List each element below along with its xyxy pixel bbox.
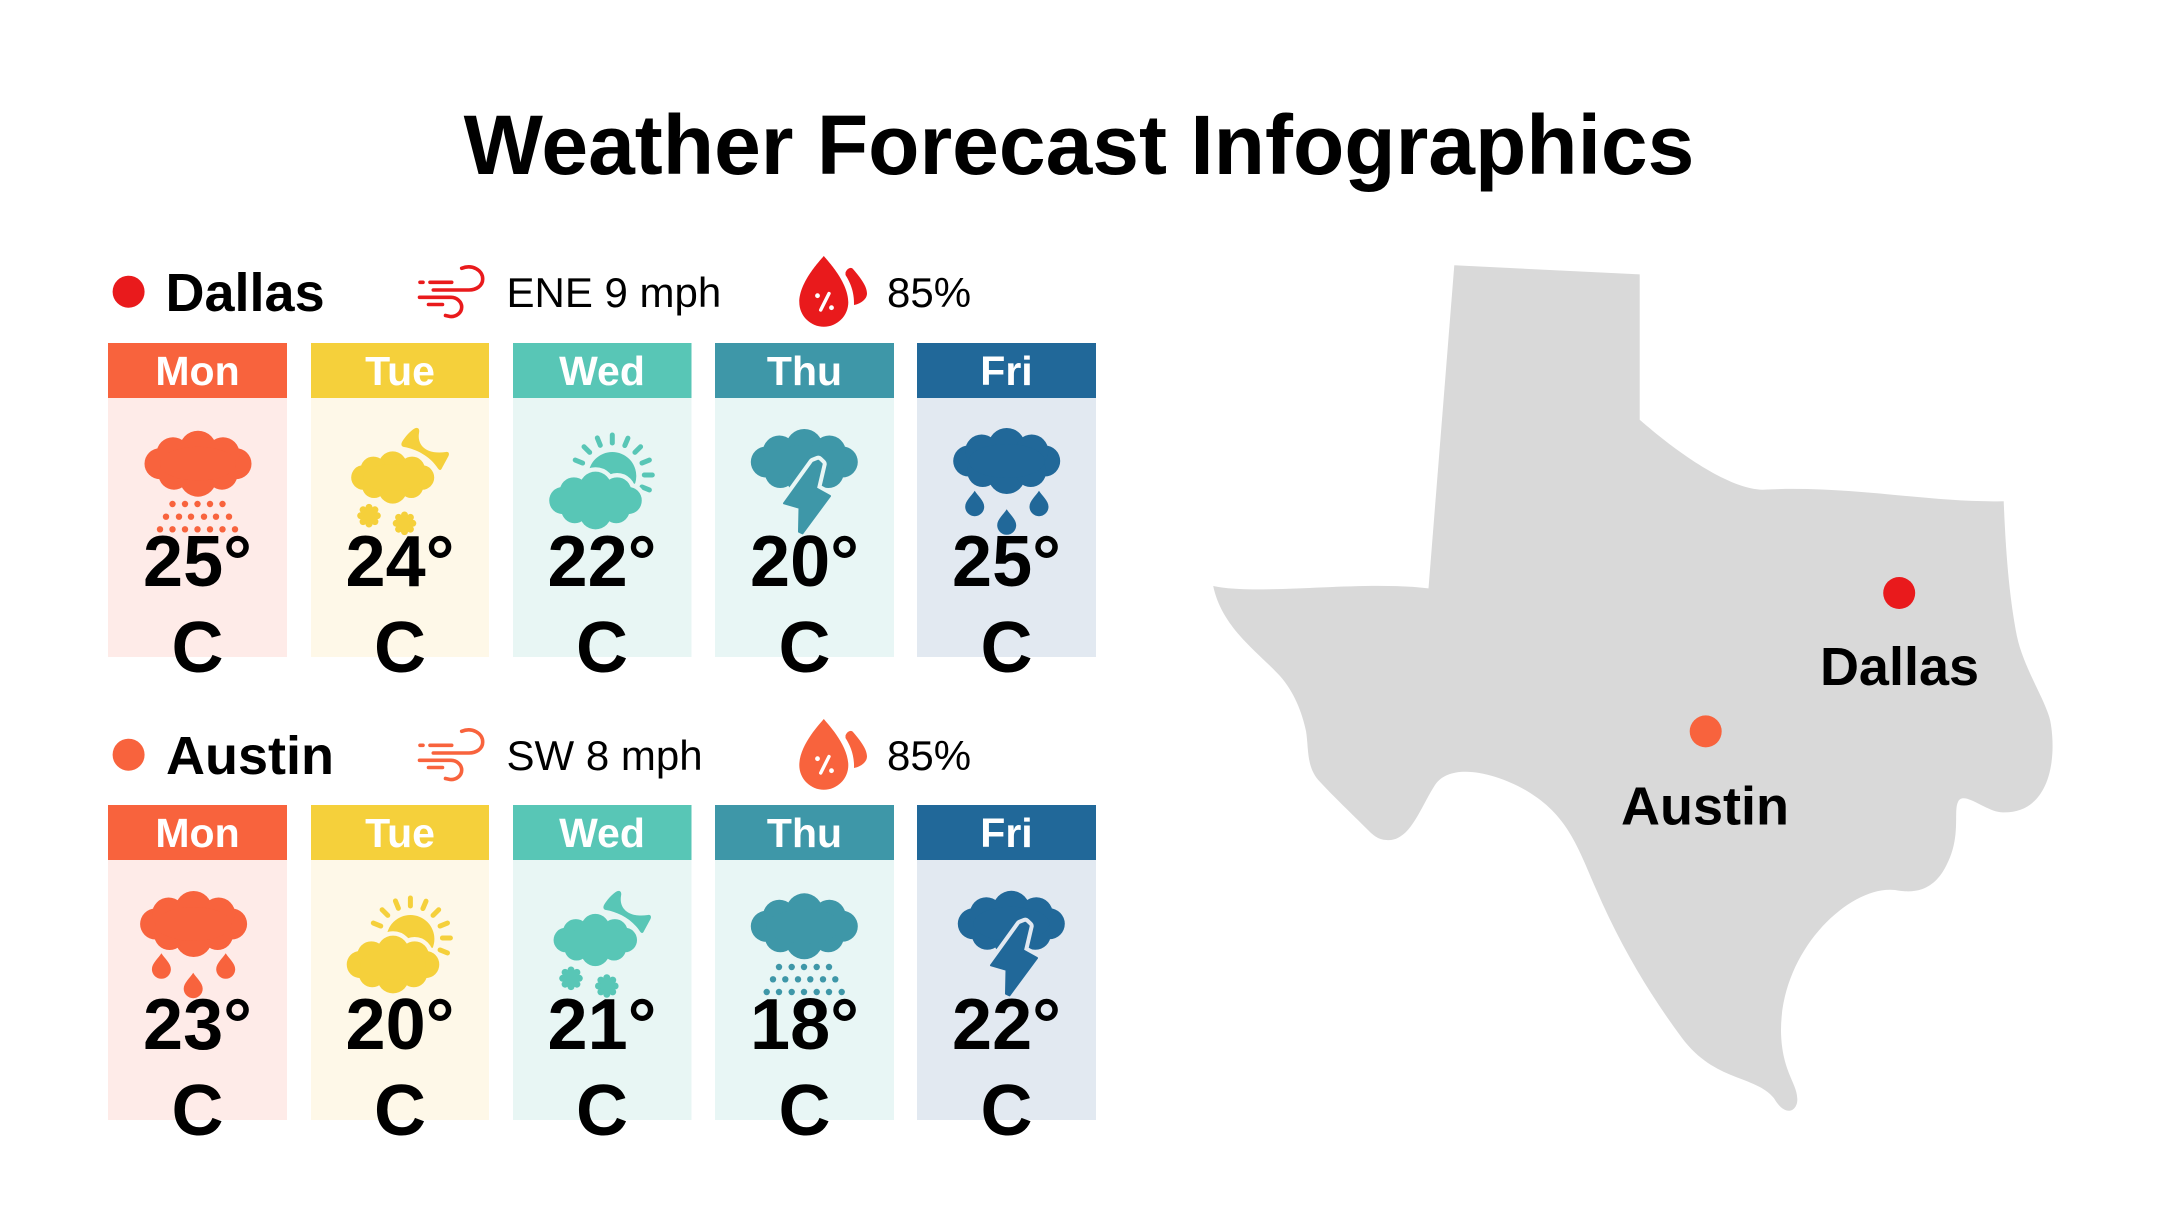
card: Dallas Thursday: Thu <box>767 348 842 394</box>
wind text: ENE 9 mph <box>506 269 721 316</box>
card: Dallas Friday <box>917 343 1096 688</box>
card: Dallas Monday: C <box>172 608 224 688</box>
icon: wind <box>420 730 483 780</box>
card: Dallas Monday: Mon <box>155 348 240 394</box>
card: Austin Thursday: Thu <box>767 810 842 856</box>
card: Dallas Friday: 25° <box>952 522 1061 602</box>
card: Austin Tuesday: 20° <box>346 985 454 1065</box>
card: Dallas Wednesday: Wed <box>559 348 645 394</box>
card: Austin Wednesday <box>513 805 692 1151</box>
humidity text: 85% <box>887 269 971 316</box>
card: Dallas Friday: C <box>980 608 1032 688</box>
card: Dallas Tuesday <box>311 343 489 688</box>
card: Austin Thursday: C <box>778 1071 830 1151</box>
card: Austin Wednesday: C <box>576 1071 628 1151</box>
card: Austin Tuesday <box>311 805 489 1151</box>
wind text: SW 8 mph <box>506 732 703 779</box>
Dallas heading: Dallas <box>166 263 325 323</box>
icon: wind <box>420 267 483 317</box>
map: Texas <box>1213 265 2053 1111</box>
title: Weather Forecast Infographics <box>464 98 1694 192</box>
card: Dallas Monday: 25° <box>143 522 252 602</box>
icon: thunderstorm cloud <box>958 891 1065 995</box>
card: Austin Wednesday: 21° <box>548 985 656 1065</box>
card: Austin Friday <box>917 805 1096 1151</box>
icon: humidity drop <box>799 256 867 327</box>
icon: rain cloud <box>953 428 1060 535</box>
panel: Dallas forecast <box>108 256 1096 688</box>
icon: thunderstorm cloud <box>751 429 858 533</box>
Dallas map label: Dallas <box>1820 637 1979 697</box>
humidity text: 85% <box>887 732 971 779</box>
card: Austin Friday: Fri <box>980 810 1033 856</box>
card: Dallas Wednesday <box>513 343 692 688</box>
Texas outline <box>1213 265 2053 1111</box>
card: Austin Monday: 23° <box>143 985 252 1065</box>
Austin heading: Austin <box>166 726 334 786</box>
Dallas marker dot <box>113 276 145 308</box>
card: Dallas Tuesday: Tue <box>365 348 435 394</box>
card: Dallas Tuesday: 24° <box>346 522 454 602</box>
card: Dallas Thursday: C <box>778 608 830 688</box>
card: Dallas Thursday <box>715 343 894 688</box>
card: Austin Thursday: 18° <box>750 985 859 1065</box>
card: Austin Monday: Mon <box>155 810 240 856</box>
card: Dallas Wednesday: C <box>576 608 628 688</box>
card: Austin Monday: C <box>172 1071 224 1151</box>
card: Dallas Friday: Fri <box>980 348 1033 394</box>
card: Austin Monday <box>108 805 287 1151</box>
card: Austin Tuesday: Tue <box>365 810 435 856</box>
icon: snow-dust cloud <box>751 893 858 995</box>
icon: snow-dust cloud <box>144 431 252 532</box>
card: Austin Wednesday: Wed <box>559 810 645 856</box>
icon: moon, cloud and snowflakes <box>554 891 651 998</box>
card: Austin Thursday <box>715 805 894 1151</box>
card: Austin Tuesday: C <box>374 1071 426 1151</box>
card: Dallas Monday <box>108 343 287 688</box>
Austin map marker <box>1690 715 1722 747</box>
Austin map label: Austin <box>1621 776 1789 836</box>
card: Dallas Wednesday: 22° <box>548 522 656 602</box>
Austin marker dot <box>113 739 145 771</box>
icon: moon, cloud and snowflakes <box>351 428 449 535</box>
icon: sun behind cloud <box>549 435 652 529</box>
card: Dallas Tuesday: C <box>374 608 426 688</box>
card: Dallas Thursday: 20° <box>750 522 859 602</box>
card: Austin Friday: C <box>980 1071 1032 1151</box>
icon: humidity drop <box>799 719 867 790</box>
icon: sun behind cloud <box>347 898 450 993</box>
panel: Austin forecast <box>108 719 1096 1151</box>
icon: rain cloud <box>140 891 247 998</box>
Dallas map marker <box>1883 577 1915 609</box>
card: Austin Friday: 22° <box>952 985 1061 1065</box>
